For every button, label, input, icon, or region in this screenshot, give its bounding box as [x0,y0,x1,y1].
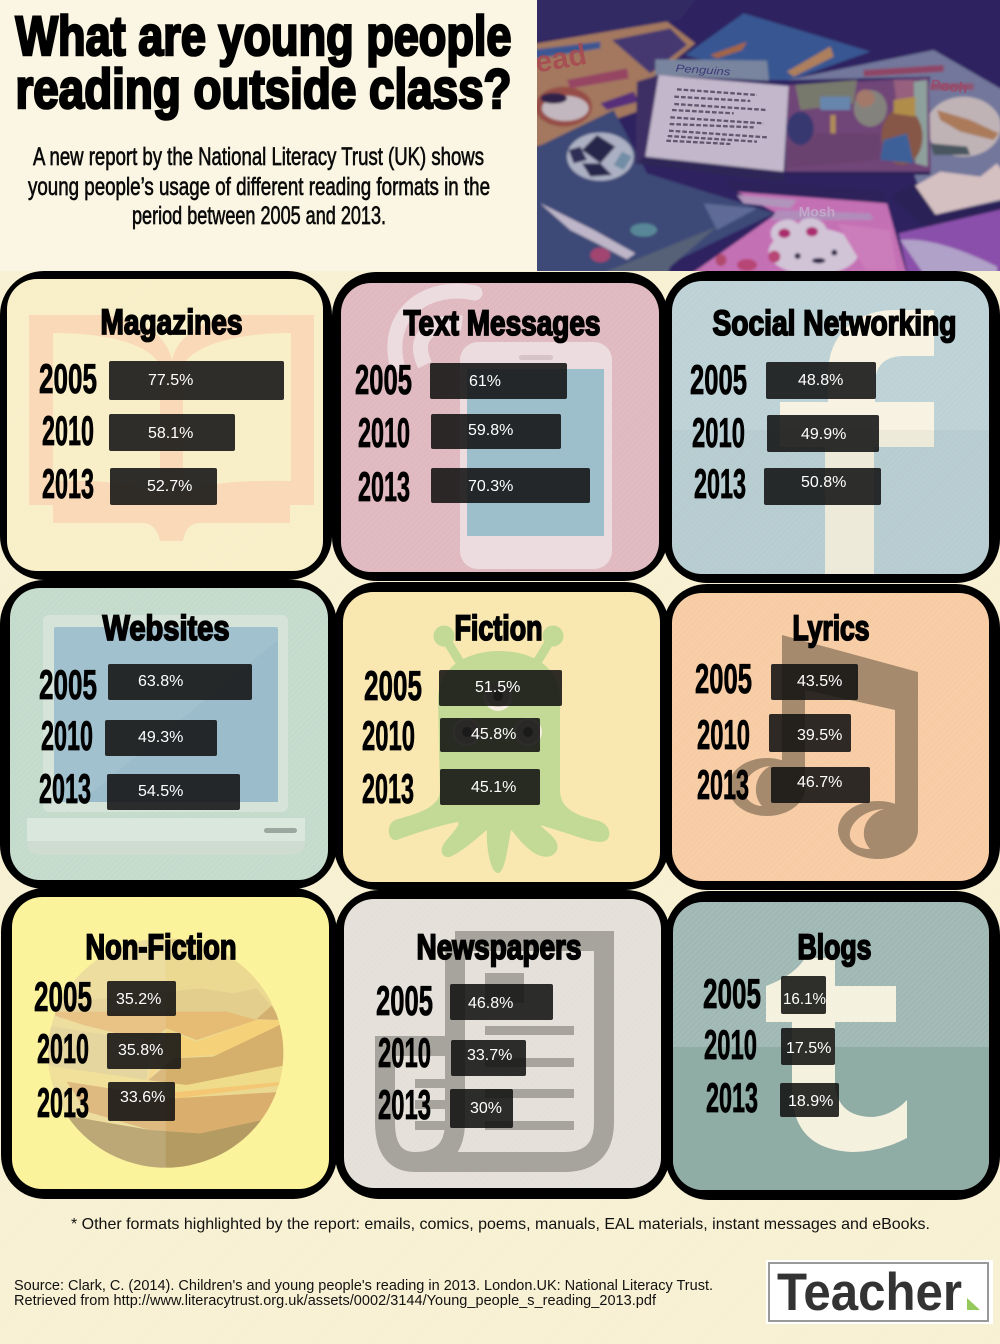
source citation [14,1278,713,1309]
intro text: period between 2005 and 2013. [132,202,386,230]
icon: open book [29,315,314,541]
heading: Fiction: Fiction [454,609,542,648]
row: 2005 46.8%: 2005 [376,977,433,1024]
row: 2013 54.5% [39,765,240,812]
row: 2005 63.8% [39,661,252,708]
row: 2005 35.2% [34,973,176,1020]
row: 2013 46.7%: 2013 [697,761,749,808]
icon: green alien [389,626,609,873]
row: 2005 35.2%: 35.2% [116,991,161,1008]
row: 2013 33.6%: 2013 [37,1079,89,1126]
row: 2010 17.5%: 17.5% [786,1040,831,1057]
row: 2010 49.3% [41,712,217,759]
row: 2013 30% [378,1081,513,1128]
title: reading outside class? [16,57,512,120]
intro text: young people’s usage of different reading formats in the [28,173,490,201]
row: 2010 35.8%: 2010 [37,1025,89,1072]
row: 2010 49.9%: 49.9% [801,426,846,443]
row: 2005 16.1%: 16.1% [783,991,826,1008]
row: 2010 45.8% [362,712,540,759]
title [16,4,512,120]
icon: smartphone with signal [395,291,612,569]
row: 2005 16.1%: 2005 [703,970,761,1017]
row: 2005 43.5%: 2005 [695,655,752,702]
row: 2005 61%: 2005 [355,356,412,403]
row: 2005 77.5%: 2005 [39,355,97,402]
row: 2010 33.7%: 33.7% [467,1047,512,1064]
row: 2010 35.8% [37,1025,181,1072]
panel: Newspapers [335,890,670,1199]
row: 2005 46.8% [376,977,553,1024]
row: 2010 49.3%: 49.3% [138,729,183,746]
icon: planet [43,935,290,1172]
row: 2013 18.9%: 18.9% [788,1093,833,1110]
heading: Non-Fiction: Non-Fiction [86,928,236,967]
heading: Magazines: Magazines [100,303,242,342]
icon: t logo [673,958,989,1192]
row: 2005 43.5% [695,655,858,702]
row: 2013 70.3%: 70.3% [468,478,513,495]
row: 2005 43.5%: 43.5% [797,673,842,690]
row: 2010 59.8% [358,409,561,456]
intro text [28,143,490,230]
row: 2013 45.1%: 45.1% [471,779,516,796]
row: 2013 18.9%: 2013 [706,1074,758,1121]
row: 2013 45.1%: 2013 [362,765,414,812]
row: 2013 54.5%: 2013 [39,765,91,812]
row: 2005 48.8%: 48.8% [798,372,843,389]
intro text: A new report by the National Literacy Trust (UK) shows [33,143,484,171]
row: 2010 17.5%: 2010 [704,1021,757,1068]
source citation: Source: Clark, C. (2014). Children's and young people's reading in 2013. London.UK: National Literacy Trust. [14,1278,713,1294]
row: 2010 39.5%: 2010 [697,711,750,758]
heading: Blogs: Blogs [798,928,872,967]
row: 2010 58.1% [42,407,235,454]
row: 2013 46.7%: 46.7% [797,774,842,791]
row: 2013 33.6%: 33.6% [120,1089,165,1106]
panel: Magazines [0,271,332,580]
panel: Social Networking [663,271,1000,583]
panel: Lyrics [663,584,1000,890]
row: 2005 63.8%: 2005 [39,661,97,708]
photo: children's books: Pooh [930,77,968,97]
title: What are young people [16,4,512,67]
row: 2010 58.1%: 2010 [42,407,94,454]
row: 2005 48.8%: 2005 [690,356,747,403]
photo: children's books: ead [532,38,589,80]
row: 2005 51.5%: 2005 [364,662,422,709]
row: 2013 70.3%: 2013 [358,463,410,510]
row: 2005 63.8%: 63.8% [138,673,183,690]
icon: laptop [27,615,305,855]
row: 2010 33.7%: 2010 [378,1029,431,1076]
row: 2013 52.7% [42,460,217,507]
row: 2010 35.8%: 35.8% [118,1042,163,1059]
icon: f logo [780,310,934,574]
row: 2010 39.5%: 39.5% [797,727,842,744]
heading: Text Messages: Text Messages [404,304,600,343]
row: 2010 59.8%: 59.8% [468,422,513,439]
row: 2013 33.6% [37,1079,175,1126]
row: 2013 45.1% [362,765,540,812]
icon: music note [728,635,918,859]
row: 2005 61%: 61% [469,373,501,390]
panel: Fiction [334,582,669,890]
row: 2010 49.9% [692,409,879,456]
panel: Blogs [665,891,1000,1200]
row: 2013 52.7%: 2013 [42,460,94,507]
row: 2013 50.8%: 50.8% [801,474,846,491]
row: 2005 35.2%: 2005 [34,973,92,1020]
row: 2013 52.7%: 52.7% [147,478,192,495]
row: 2010 59.8%: 2010 [358,409,410,456]
row: 2010 33.7% [378,1029,526,1076]
row: 2010 49.9%: 2010 [692,409,745,456]
row: 2005 77.5%: 77.5% [148,372,193,389]
row: 2005 61% [355,356,567,403]
row: 2005 51.5%: 51.5% [475,679,520,696]
row: 2010 39.5% [697,711,851,758]
row: 2013 46.7% [697,761,870,808]
source citation: Retrieved from http://www.literacytrust.org.uk/assets/0002/3144/Young_people_s_reading_2013.pdf [14,1293,657,1309]
row: 2010 49.3%: 2010 [41,712,93,759]
footnote: * Other formats highlighted by the report: emails, comics, poems, manuals, EAL materials, instant messages and eBooks. [71,1216,930,1233]
row: 2005 77.5% [39,355,284,402]
panel: Websites [0,580,337,889]
row: 2013 70.3% [358,463,590,510]
row: 2013 30%: 2013 [378,1081,431,1128]
row: 2013 50.8%: 2013 [694,460,746,507]
row: 2013 30%: 30% [470,1100,502,1117]
icon: newspaper [385,941,604,1162]
row: 2010 58.1%: 58.1% [148,425,193,442]
row: 2005 46.8%: 46.8% [468,995,513,1012]
row: 2013 50.8% [694,460,881,507]
row: 2013 54.5%: 54.5% [138,783,183,800]
photo: children's books [537,0,1000,271]
panel: Non-Fiction [1,888,337,1199]
row: 2005 48.8% [690,356,876,403]
logo mark: green triangle [967,1298,980,1310]
row: 2005 51.5% [364,662,562,709]
logo: Teacher: Teacher [777,1263,962,1322]
heading: Newspapers: Newspapers [416,928,582,967]
photo: children's books: Penguins [675,63,732,79]
row: 2010 45.8%: 45.8% [471,726,516,743]
heading: Websites: Websites [102,609,230,648]
heading: Lyrics: Lyrics [792,609,870,648]
photo: children's books: Mosh [799,204,835,220]
row: 2010 45.8%: 2010 [362,712,415,759]
panel: Text Messages [332,272,668,581]
